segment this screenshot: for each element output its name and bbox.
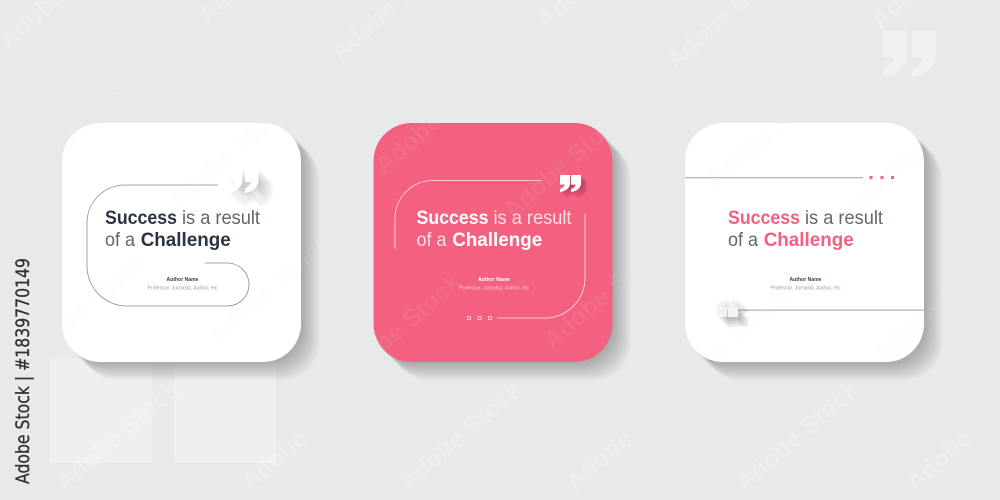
quote text: of a [416, 229, 447, 251]
background watermark: Adobe Stock [394, 375, 527, 497]
quote text: of a [105, 229, 135, 251]
quote text: Challenge [452, 229, 542, 251]
quote text: Success [105, 207, 177, 229]
quote text: Success [728, 207, 800, 229]
watermark overlay across cards: Adobe Stock [203, 228, 337, 350]
frame outline [395, 180, 585, 318]
watermark overlay across cards: Adobe Stock [700, 73, 834, 195]
watermark overlay across cards: Adobe Stock [658, 283, 792, 405]
background watermark: Adobe Stock [731, 375, 864, 497]
capsule outline [87, 185, 249, 306]
author: Professor, Jurnalist, Author, etc [770, 285, 841, 291]
decorative large quote mark top right [883, 31, 936, 77]
quote text [728, 207, 884, 251]
quote text: is a result [494, 207, 572, 229]
three small squares [468, 316, 492, 320]
background watermark: Adobe [561, 424, 638, 497]
quote text [105, 207, 261, 251]
author [770, 277, 841, 291]
quote text: of a [728, 229, 758, 251]
bottom rule [738, 310, 924, 311]
card body [685, 123, 924, 362]
author [459, 277, 529, 291]
watermark overlay across cards: Adobe Stock [163, 93, 297, 215]
quote icon [560, 175, 587, 198]
author: Professor, Jurnalist, Author, etc [148, 285, 218, 291]
watermark overlay across cards: Adobe Stock [868, 248, 1000, 370]
watermark overlay across cards: Adobe Stock [333, 268, 467, 390]
author: Author Name [478, 277, 510, 283]
watermark overlay across cards: Adobe Stock [538, 233, 672, 355]
background watermark: Adobe [236, 424, 313, 497]
author: Author Name [166, 277, 199, 283]
watermark overlay across cards: Adobe Stock [40, 43, 174, 165]
decorative light rectangles bottom left [50, 358, 276, 463]
quote text [416, 207, 572, 251]
watermark overlay across cards: Adobe Stock [813, 123, 947, 245]
card body [62, 123, 301, 362]
quote icon [717, 299, 748, 327]
card shadow [687, 125, 942, 380]
card shadow [376, 125, 630, 380]
quote text: Challenge [764, 229, 854, 251]
watermark overlay across cards: Adobe Stock [498, 103, 632, 225]
watermark overlay across cards [18, 43, 1000, 405]
author: Author Name [790, 277, 822, 283]
quote text: Challenge [141, 229, 231, 251]
author [148, 277, 218, 291]
quote text: is a result [182, 207, 261, 229]
card body [374, 123, 612, 362]
background watermark: Adobe Stock [51, 375, 184, 497]
panel: white card with pink accents [685, 123, 942, 380]
panel: pink card [374, 123, 630, 380]
panel: white card with capsule outline [62, 123, 319, 380]
top rule [685, 177, 863, 178]
quote text: is a result [805, 207, 884, 229]
watermark overlay across cards: Adobe Stock [18, 246, 152, 368]
quote text: Success [416, 207, 489, 229]
quote icon [228, 168, 272, 207]
stock id vertical text: Adobe Stock | #1839770149 [12, 258, 34, 484]
watermark overlay across cards: Adobe Stock [370, 58, 504, 180]
pink dots [870, 176, 894, 179]
background watermark: Adobe [901, 424, 978, 497]
author: Professor, Jurnalist, Author, etc [459, 285, 529, 291]
card shadow [64, 125, 319, 380]
